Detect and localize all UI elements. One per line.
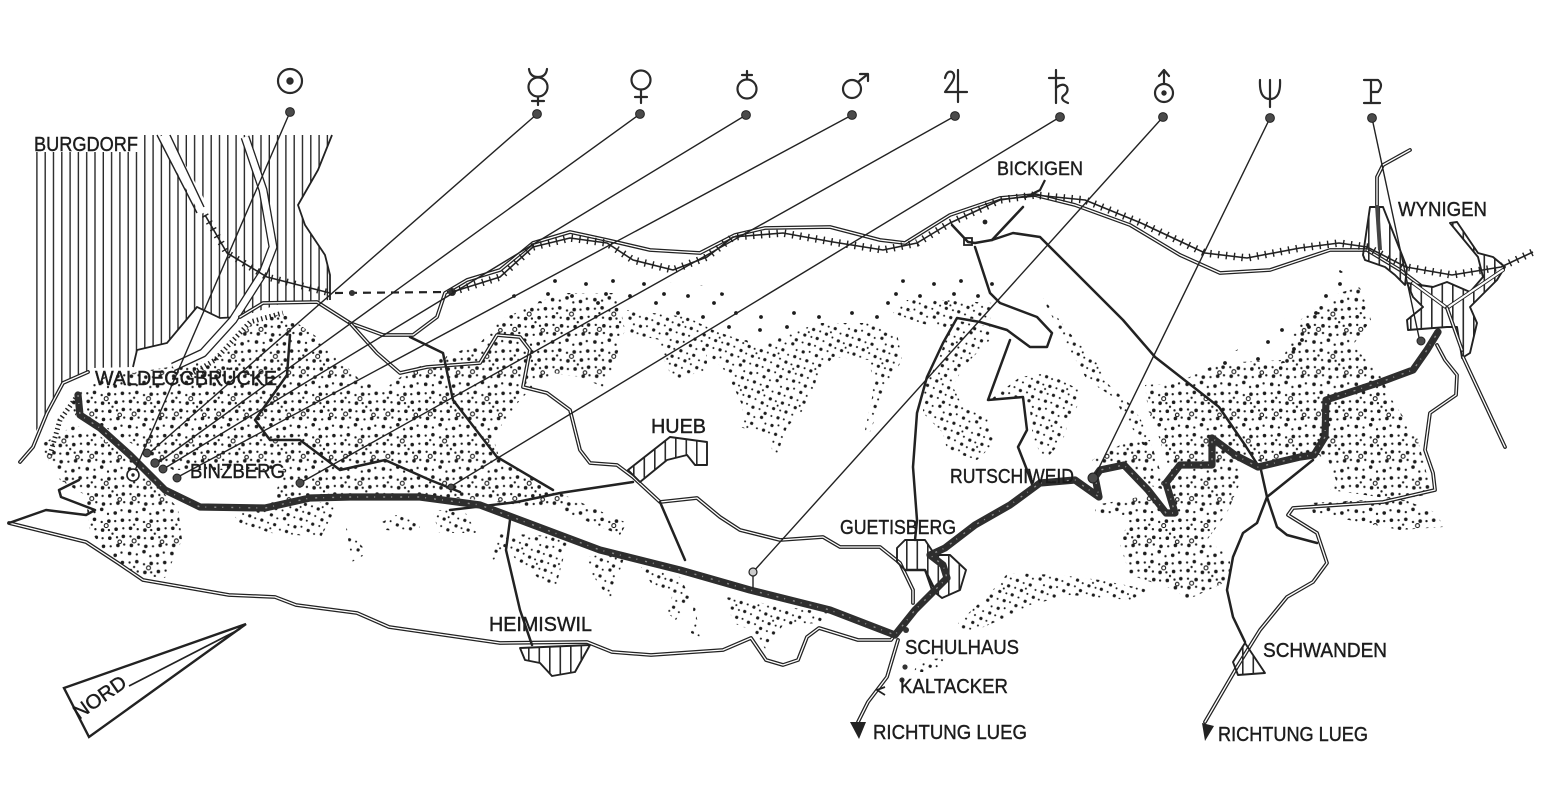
north arrow — [64, 624, 246, 737]
label: Burgdorf: BURGDORF — [34, 134, 138, 156]
road: river through Burgdorf — [173, 137, 273, 367]
label: Schwanden: SCHWANDEN — [1263, 640, 1387, 662]
label: Kaltacker: KALTACKER — [900, 676, 1008, 698]
direction arrow: Richtung Lueg (Schulhaus) — [850, 722, 866, 739]
icon: Jupiter symbol — [945, 70, 967, 102]
planet top pins — [286, 108, 1376, 122]
single-line paths — [255, 207, 1317, 645]
main thick route — [78, 332, 1438, 635]
hatched village: Guetisberg — [897, 540, 966, 598]
hatched village: Heimiswil — [520, 645, 590, 676]
label: Heimiswil: HEIMISWIL — [489, 614, 592, 636]
road: branch through forest to Guetisberg — [350, 323, 913, 603]
label: Schulhaus: SCHULHAUS — [905, 637, 1019, 659]
road: Burgdorf to Wynigen along railway — [240, 195, 1420, 335]
label: Richtung Lueg (right): RICHTUNG LUEG — [1218, 724, 1368, 746]
label: Guetisberg: GUETISBERG — [840, 517, 956, 539]
icon: Neptune symbol — [1260, 80, 1280, 107]
road: Schwanden double line to Wynigen — [1205, 345, 1457, 722]
icon: Pluto symbol — [1364, 80, 1381, 103]
label: Bickigen: BICKIGEN — [997, 159, 1083, 180]
icon: Saturn symbol — [1049, 70, 1068, 103]
road: Waldeggbrücke river bank — [20, 372, 88, 462]
label: Richtung Lueg (left): RICHTUNG LUEG — [873, 722, 1027, 744]
icon: Sun symbol — [278, 69, 302, 93]
small buildings near Bickigen and Kaltacker — [877, 180, 1045, 695]
road: Schulhaus to Richtung Lueg — [858, 640, 898, 722]
label: Rutschiweid: RUTSCHIWEID — [950, 466, 1074, 488]
creek outline at west end — [9, 480, 95, 523]
place labels — [34, 134, 1487, 746]
planet alignment lines — [133, 112, 1420, 572]
icon: Venus symbol — [632, 70, 650, 103]
label: Wynigen: WYNIGEN — [1398, 199, 1487, 221]
label: Binzberg: BINZBERG — [190, 461, 285, 483]
hatched village: Wynigen — [1363, 150, 1505, 447]
icon: Mars symbol — [843, 74, 868, 98]
north arrow: NORD — [69, 672, 131, 724]
icon: Uranus symbol — [1155, 70, 1173, 102]
icon: Earth symbol — [738, 71, 756, 98]
icon: Mercury symbol — [528, 69, 548, 105]
planet endpoints on the route — [127, 337, 1425, 588]
hatched village: Schwanden — [1233, 643, 1265, 675]
direction arrow: Richtung Lueg (Schwanden) — [1202, 723, 1214, 741]
label: Waldeggbrücke: WALDEGGBRÜCKE — [95, 368, 277, 390]
label: Hueb: HUEB — [651, 416, 706, 438]
railway line with ticks — [205, 195, 1533, 296]
map area: Burgdorf hatched town — [33, 135, 332, 437]
forest areas (stippled) — [40, 270, 1443, 672]
hatched village: Hueb — [628, 437, 707, 482]
lower road: west to Schulhaus — [9, 523, 897, 665]
